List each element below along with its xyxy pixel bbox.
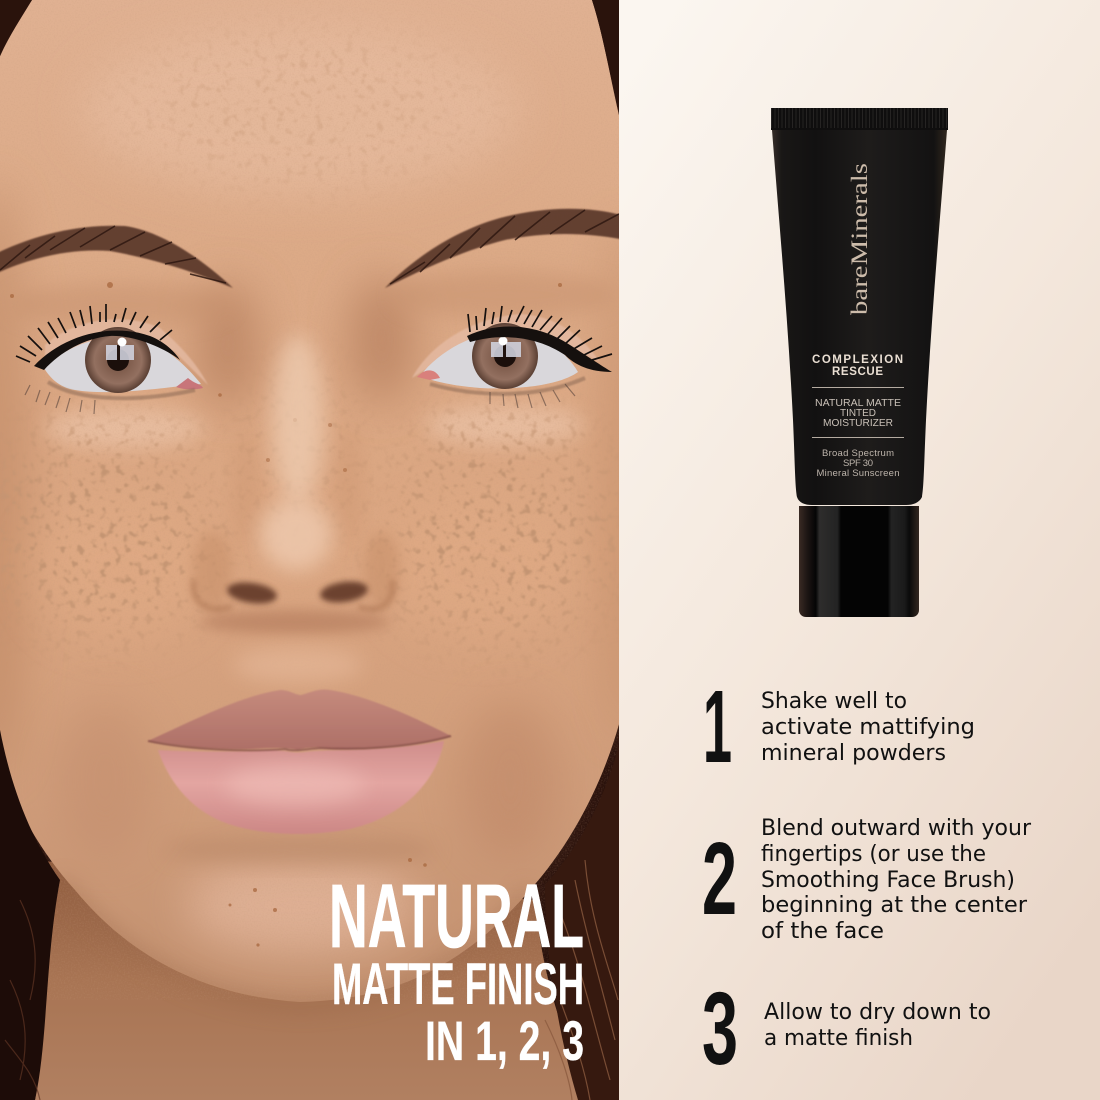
step 2 text: Smoothing Face Brush) (761, 868, 1015, 893)
step 2 text: fingertips (or use the (761, 842, 986, 867)
tube body (771, 108, 948, 505)
neck (30, 860, 585, 1100)
headline line: in 1, 2, 3: IN 1, 2, 3 (425, 1009, 584, 1072)
right panel background (619, 0, 1100, 1100)
product descriptor: MOISTURIZER (823, 417, 893, 429)
product name: COMPLEXION (812, 354, 904, 366)
lips (148, 690, 451, 834)
step 2 (702, 816, 1032, 944)
step 3 (702, 971, 991, 1086)
sunscreen descriptor: Mineral Sunscreen (816, 468, 900, 479)
portrait photo panel (0, 0, 650, 1100)
step 3 text (764, 1000, 991, 1051)
left eyebrow (0, 226, 233, 288)
headline (329, 867, 584, 1072)
headline line: matte finish: MATTE FINISH (332, 952, 584, 1017)
right eyebrow (385, 209, 625, 288)
sunscreen descriptor: Broad Spectrum (822, 448, 894, 459)
step 2 text (761, 816, 1032, 944)
sunscreen descriptor (816, 448, 900, 479)
step 1 text: mineral powders (761, 741, 946, 766)
step 1 text (761, 689, 975, 766)
label rule (812, 387, 904, 388)
step number 1: 1 (703, 669, 732, 784)
step 2 text: beginning at the center (761, 893, 1028, 918)
product tube (771, 108, 948, 617)
face skin (0, 0, 625, 1002)
step 2 text: Blend outward with your (761, 816, 1032, 841)
tube cap (799, 506, 919, 617)
product descriptor: TINTED (840, 407, 876, 419)
step number 3: 3 (702, 971, 738, 1086)
headline line: natural: NATURAL (329, 867, 584, 967)
left eye (16, 304, 208, 414)
philtrum shade (233, 647, 363, 683)
product name: RESCUE (832, 366, 884, 378)
step number 2: 2 (702, 821, 737, 936)
step 3 text: a matte finish (764, 1026, 913, 1051)
label rule (812, 437, 904, 438)
step 3 text: Allow to dry down to (764, 1000, 991, 1025)
sunscreen descriptor: SPF 30 (843, 458, 873, 469)
nose (192, 335, 400, 634)
product descriptor (815, 397, 901, 429)
nostrils (226, 580, 278, 606)
product name (812, 354, 904, 378)
freckles (10, 48, 610, 947)
product descriptor: NATURAL MATTE (815, 397, 901, 409)
tube crimp (771, 108, 948, 130)
step 1 (703, 669, 975, 784)
step 2 text: of the face (761, 919, 884, 944)
skin grain (36, 80, 619, 999)
right eye (412, 306, 612, 408)
hair (0, 0, 619, 1100)
brand name: bareMinerals (847, 163, 872, 315)
step 1 text: activate mattifying (761, 715, 975, 740)
side hair (0, 0, 625, 1100)
face shading (0, 25, 650, 1005)
step 1 text: Shake well to (761, 689, 907, 714)
